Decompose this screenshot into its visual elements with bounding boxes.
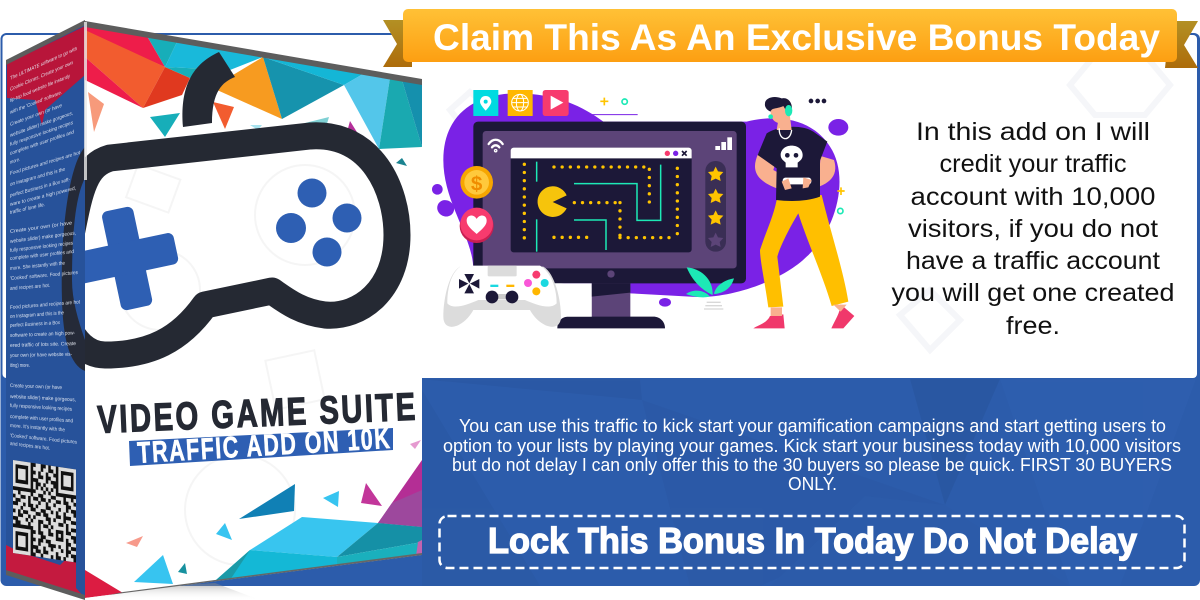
text block: bonus description: credit your traffic [940, 150, 1126, 178]
side: red top facets [7, 26, 85, 125]
side: tiny copy: your own (or have website vis- [10, 352, 72, 359]
side: tiny copy: more. It's instantly with the [10, 423, 65, 433]
three dots [809, 99, 826, 103]
side: tiny copy [9, 46, 81, 452]
side: tiny copy: and recipes are hot. [10, 283, 50, 292]
side: controller seen through [62, 147, 85, 371]
side: tiny copy: fully responsive looking recipes [10, 403, 72, 413]
text block: traffic explanation [443, 416, 1181, 494]
side: tiny copy: on Instagram and this is the [10, 310, 64, 320]
controller: d-pad [85, 206, 178, 310]
text block: bonus description: have a traffic account [906, 247, 1160, 275]
side: tiny copy: more. [10, 157, 20, 166]
panel: lower blue background facets [420, 379, 1196, 586]
watermark: faint hexagon logos [450, 55, 1170, 350]
side: tiny copy: Food pictures and recipes are hot [10, 150, 80, 177]
text block: bonus description: free. [1006, 312, 1060, 340]
icon: globe [508, 90, 533, 116]
rating pill with stars [705, 161, 726, 252]
side: tiny copy: website slider) make gorgeous, [10, 394, 76, 403]
icon: dollar coin: $ [471, 172, 483, 195]
front: bottom colour facets [85, 460, 422, 598]
text block: bonus description [892, 118, 1174, 340]
text block: bonus description: you will get one created [892, 279, 1174, 307]
subtitle: blue band: TRAFFIC ADD ON 10K [136, 421, 391, 470]
box: front face [61, 22, 422, 600]
controller: four buttons [276, 178, 362, 266]
text block: bonus description: visitors, if you do not [908, 215, 1158, 243]
illustration: gamer with monitor [432, 90, 854, 328]
text block: bonus description: In this add on I will [916, 118, 1150, 146]
side: tiny copy: ered traffic of lots site. Create [10, 341, 76, 349]
shadow: box ground shadow [30, 582, 260, 600]
icon: heart [460, 208, 494, 243]
side: spine highlight [84, 22, 87, 180]
side: tiny copy: Create your own (or have [10, 103, 62, 128]
side: tiny copy: software to create an high pow- [10, 330, 75, 339]
side: tiny copy: and recipes are hot. [10, 441, 50, 452]
box: top gray edge [85, 21, 422, 85]
side: tiny copy: perfect Business in a Box [10, 320, 60, 329]
decorative sparkle and ring [585, 98, 845, 214]
side: tiny copy: on Instagram and this is the [10, 167, 65, 188]
side: tiny copy: tip-top food website file instantly [10, 73, 70, 104]
icon: white game controller [443, 266, 561, 327]
text block: traffic explanation: option to your lists by playing your games. Kick start your business today with 10,000 visitors [443, 436, 1181, 456]
front: faint doodles [120, 164, 355, 565]
product box [6, 20, 422, 600]
side: tiny copy: fully responsive looking recipes [10, 120, 73, 148]
icon: signal bars [715, 137, 732, 150]
text block: bonus description: account with 10,000 [910, 183, 1156, 211]
side: tiny copy: more. She instantly with the [10, 261, 65, 272]
side: tiny copy: Cookie Clones. Create your own [10, 60, 73, 93]
side: tiny copy: Food pictures and recipes are hot [10, 299, 81, 311]
side: tiny copy: 'Cooked' software. Food pictures [10, 270, 78, 282]
side: tiny copy: The ULTIMATE software to go with [10, 46, 77, 82]
side: tiny copy: perfect Business in a Box soft- [10, 177, 70, 199]
side: tiny copy: iting) more. [10, 363, 30, 369]
front: controller outline [61, 136, 397, 355]
icon: dollar coin [460, 166, 493, 199]
character: gamer [753, 97, 854, 328]
illustration: monitor [473, 122, 746, 328]
icon: location pin [473, 90, 498, 116]
title: product name: VIDEO GAME SUITE [97, 386, 416, 442]
controller: upper cable arc [182, 52, 235, 127]
side: tiny copy: traffic of lone life. [10, 202, 45, 216]
box: side face [6, 20, 87, 600]
side: tiny copy: complete with user profiles and [10, 129, 74, 157]
illustration: purple blob background [432, 93, 848, 307]
side: tiny copy: ware to create a high powered, [10, 186, 76, 208]
icon: plant [686, 267, 734, 309]
side: tiny copy: Create your own (or have [10, 220, 72, 235]
side: gray top and bottom edges [6, 20, 85, 600]
call to action: dashed box: Lock This Bonus In Today Do Not Delay [488, 520, 1137, 561]
side: tiny copy: website slider) make gorgeous, [10, 230, 76, 245]
text block: traffic explanation: but do not delay I can only offer this to the 30 buyers so please be quick. FIRST 30 BUYERS [452, 455, 1172, 475]
side: bottom red facets [6, 545, 85, 598]
game screen: pacman maze [511, 148, 692, 252]
side: tiny copy: Create your own (or have [10, 383, 62, 391]
front: small triangles [88, 92, 421, 584]
side: QR code [13, 460, 76, 562]
ribbon: banner fold ends [383, 20, 1198, 68]
side: tiny copy: complete with user profiles and [10, 414, 73, 424]
front: top colour facets [85, 22, 422, 149]
side: tiny copy: complete with user profiles and [10, 249, 74, 262]
text block: traffic explanation: ONLY. [788, 474, 837, 494]
text block: traffic explanation: You can use this traffic to kick start your gamification campaigns and start getting users to [459, 416, 1166, 436]
banner: heading: Claim This As An Exclusive Bonus Today [433, 17, 1160, 58]
side: tiny copy: 'Cooked' software. Food pictures [10, 433, 77, 446]
front: gray bottom edge [106, 553, 422, 596]
icon: play button [543, 90, 569, 116]
side: tiny copy: with the 'Cooked' software. [9, 90, 62, 116]
side: tiny copy: website slider) make gorgeous, [9, 110, 73, 139]
side: tiny copy: fully responsive looking recipes [10, 240, 73, 254]
icon: wifi [489, 140, 503, 151]
